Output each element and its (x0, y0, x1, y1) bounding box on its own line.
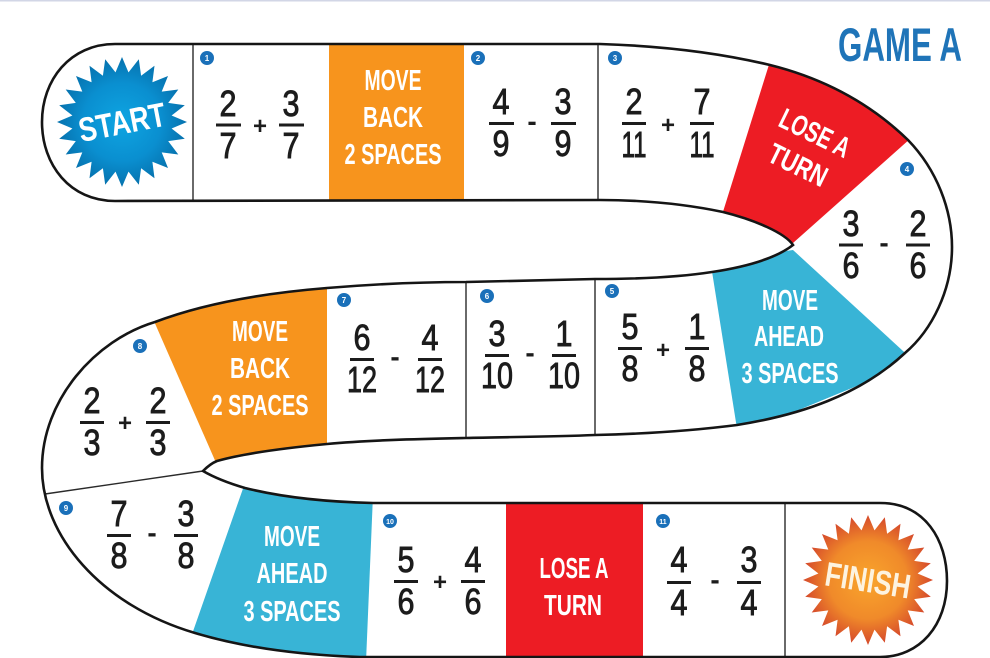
action: lose a turn bottom (540, 553, 609, 622)
action: move ahead right: 3 SPACES (742, 358, 838, 390)
square 4: 3 (842, 203, 860, 244)
square 8 (80, 339, 170, 463)
square 7: 4 (422, 317, 438, 358)
action: lose a turn top (763, 103, 855, 194)
square 8: + (118, 410, 132, 437)
square 4: - (879, 227, 889, 258)
square 8: 2 (150, 380, 166, 421)
action: move ahead right: AHEAD (754, 321, 824, 353)
square 2 (471, 51, 576, 164)
square 2: 3 (554, 81, 572, 122)
square 9: 8 (110, 535, 128, 576)
square 6: 10 (481, 355, 513, 396)
square 11: 4 (670, 539, 688, 580)
square 8: 2 (84, 380, 100, 421)
square 5: 8 (622, 348, 638, 389)
square 3: 3 (613, 54, 618, 63)
square 9: 3 (178, 493, 194, 534)
square 3: 7 (694, 81, 710, 122)
action: move ahead bottom: 3 SPACES (244, 596, 340, 628)
action: move back middle (212, 316, 308, 422)
top edge strip (0, 0, 990, 2)
square 10: 6 (464, 581, 482, 622)
square 1: 7 (282, 125, 300, 166)
square 6: 10 (548, 355, 580, 396)
square 11: 4 (670, 582, 688, 623)
square 1: 2 (220, 83, 236, 124)
square 3: 11 (690, 124, 714, 165)
finish label: FINISH (822, 555, 913, 606)
square 3: 11 (622, 124, 646, 165)
square 4: 6 (910, 245, 926, 286)
square 9 (59, 493, 198, 576)
square 1: + (253, 113, 267, 140)
square 5: 5 (610, 287, 615, 296)
square 6: 6 (485, 292, 490, 301)
square 8: 3 (150, 422, 166, 463)
square 4: 4 (905, 165, 910, 174)
start label: START (75, 96, 169, 150)
action: move ahead right (742, 285, 838, 390)
action: move ahead bottom: MOVE (264, 521, 320, 553)
square 10: + (433, 569, 447, 596)
square 10 (383, 514, 485, 622)
action: lose a turn bottom: TURN (544, 590, 602, 622)
square dividers (45, 44, 785, 657)
square 9: 8 (178, 535, 194, 576)
square 3: + (661, 112, 675, 139)
start burst (57, 57, 187, 187)
square 2: 9 (492, 123, 510, 164)
square 6: - (525, 337, 535, 368)
square 1: 3 (282, 83, 300, 124)
action: lose a turn bottom: LOSE A (540, 553, 609, 585)
action: move back top: 2 SPACES (344, 139, 442, 171)
square 3: 2 (626, 81, 642, 122)
action: move ahead right: MOVE (762, 285, 818, 317)
square 7: 12 (347, 359, 377, 400)
action: move back middle: 2 SPACES (212, 390, 308, 422)
square 7: 7 (342, 296, 347, 305)
square 11: 4 (740, 582, 758, 623)
action: move ahead bottom: AHEAD (256, 558, 328, 590)
action: move back middle: BACK (230, 353, 290, 385)
square 9: 9 (64, 504, 69, 513)
square 2: - (527, 106, 537, 136)
square 1 (200, 51, 304, 166)
action: move back top: MOVE (364, 65, 422, 97)
square 2: 4 (492, 81, 510, 122)
square 7: 6 (354, 317, 370, 358)
square 7 (337, 293, 445, 400)
square 11 (656, 514, 761, 623)
square 9: 7 (110, 493, 128, 534)
action: lose a turn top: LOSE A (774, 103, 855, 165)
square 5: + (656, 337, 670, 364)
coloured action squares (150, 40, 920, 658)
square 11: 11 (659, 519, 667, 526)
square 3 (608, 51, 714, 165)
square 1: 7 (220, 125, 236, 166)
action: move back middle: MOVE (232, 316, 288, 348)
square 8: 3 (84, 422, 100, 463)
action: move ahead bottom (244, 521, 340, 628)
square 5 (605, 284, 709, 389)
square 4: 6 (842, 245, 860, 286)
square 2: 9 (554, 123, 572, 164)
square 9: - (147, 517, 157, 548)
square 6: 3 (488, 313, 506, 354)
square 11: 3 (740, 539, 758, 580)
square 6 (480, 289, 580, 396)
square 10: 6 (398, 581, 414, 622)
square 2: 2 (476, 54, 481, 63)
action: lose a turn top: TURN (763, 138, 832, 194)
square 4 (839, 162, 930, 286)
square 10: 4 (464, 539, 482, 580)
square 6: 1 (556, 313, 572, 354)
action: move back top (344, 65, 442, 171)
finish burst (803, 515, 933, 645)
square 5: 8 (688, 348, 706, 389)
square 7: - (390, 341, 400, 372)
square 1: 1 (205, 54, 210, 63)
action: move back top: BACK (363, 102, 423, 134)
square 10: 5 (398, 539, 414, 580)
square 11: - (710, 564, 720, 595)
square 8: 8 (138, 342, 143, 351)
square 4: 2 (910, 203, 926, 244)
square 7: 12 (415, 359, 445, 400)
square 5: 1 (688, 306, 706, 347)
square 10: 10 (386, 519, 394, 526)
square 5: 5 (622, 306, 638, 347)
